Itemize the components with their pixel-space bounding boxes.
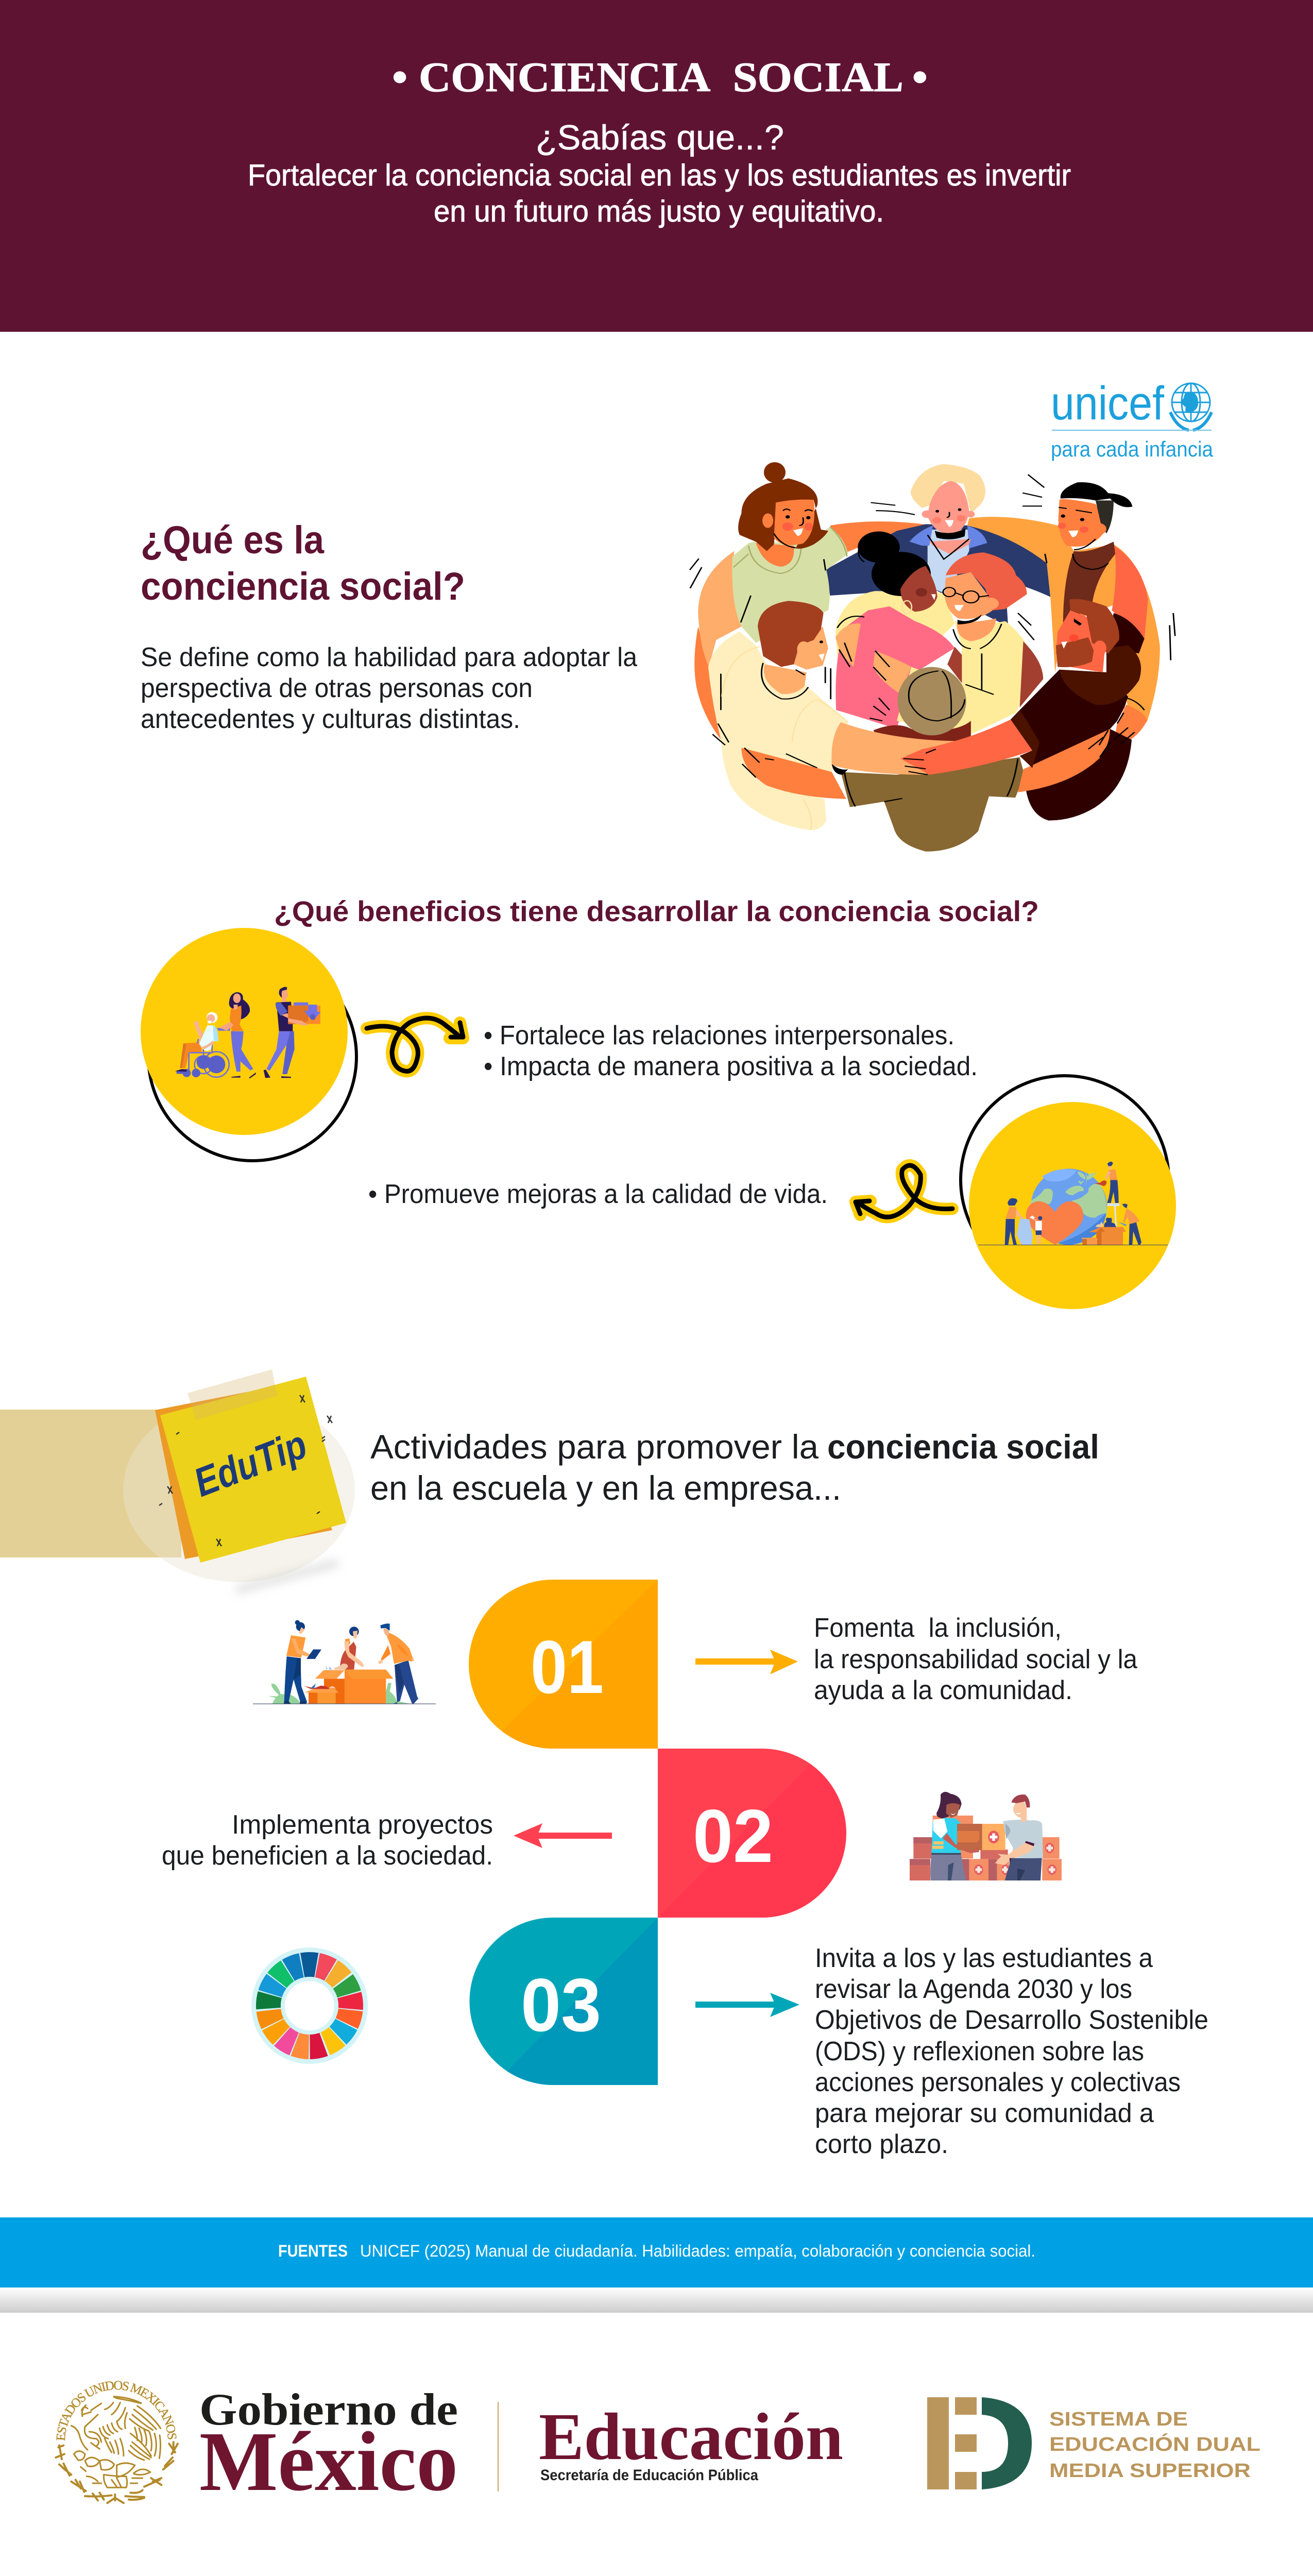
panel: step 01 [253, 1580, 1137, 1749]
definition text: antecedentes y culturas distintas. [141, 704, 520, 734]
step text: para mejorar su comunidad a [815, 2098, 1154, 2128]
step text: que beneficien a la sociedad. [162, 1841, 493, 1871]
benefit text: • Fortalece las relaciones interpersonales. [484, 1021, 954, 1050]
arrow: squiggle right [367, 1018, 463, 1071]
illustration: helping people [175, 987, 321, 1078]
edutip label: EduTip [188, 1421, 313, 1505]
logo: sistema de educacion dual: SISTEMA DE [1049, 2409, 1188, 2430]
arrow [514, 1823, 612, 1848]
intro text [248, 159, 1071, 228]
illustration: people hugging in a circle [690, 462, 1175, 852]
panel: step 02: 02 [693, 1794, 773, 1878]
panel: step 03: 03 [521, 1963, 601, 2047]
benefit text [484, 1021, 978, 1081]
panel: header [0, 0, 1313, 332]
logo: educacion: Educación [539, 2400, 843, 2474]
panel: benefit one [141, 928, 978, 1161]
sources text: FUENTES [278, 2242, 348, 2260]
arrow: squiggle left [856, 1165, 952, 1217]
panel: benefit two [368, 1076, 1176, 1309]
unicef logo: para cada infancia [1051, 437, 1214, 461]
definition text [141, 642, 637, 734]
icon: sdg wheel [251, 1947, 368, 2064]
heading: benefits: ¿Qué beneficios tiene desarrollar la conciencia social? [274, 895, 1039, 927]
intro text: en un futuro más justo y equitativo. [434, 195, 884, 228]
definition text: perspectiva de otras personas con [141, 673, 533, 703]
step text: Invita a los y las estudiantes a [815, 1943, 1153, 1973]
heading: conciencia social? [141, 565, 465, 608]
illustration: earth and heart [978, 1162, 1168, 1245]
panel: edutip note [0, 1369, 355, 1589]
step text: (ODS) y reflexionen sobre las [815, 2037, 1144, 2066]
benefit text: • Promueve mejoras a la calidad de vida. [368, 1179, 828, 1209]
panel: que es la conciencia social [141, 518, 637, 734]
arrow [695, 1993, 799, 2017]
step text: corto plazo. [815, 2129, 948, 2159]
step text: Fomenta la inclusión, [814, 1613, 1062, 1643]
icon: mexican coat of arms: ESTADOS UNIDOS MEXICANOS [56, 2381, 176, 2441]
definition text: Se define como la habilidad para adoptar la [141, 642, 637, 672]
subtitle: ¿Sabías que...? [536, 118, 784, 157]
step text [162, 1810, 493, 1871]
illustration: donation box [253, 1620, 436, 1704]
step text: Implementa proyectos [232, 1810, 493, 1840]
step text: acciones personales y colectivas [815, 2067, 1181, 2097]
step text: revisar la Agenda 2030 y los [815, 1974, 1132, 2004]
heading [141, 518, 465, 608]
arrow [695, 1650, 798, 1674]
logo: gobierno de mexico: Gobierno de [199, 2385, 458, 2435]
illustration: volunteers with boxes [910, 1792, 1062, 1880]
icon: mexican coat of arms [55, 2381, 179, 2504]
heading: activities [370, 1428, 1099, 1507]
logo: sistema de educacion dual: EDUCACIÓN DUAL [1049, 2433, 1260, 2455]
unicef logo [1051, 377, 1214, 461]
logo: educacion: Secretaría de Educación Pública [540, 2467, 758, 2484]
benefit text: • Impacta de manera positiva a la sociedad. [484, 1052, 978, 1081]
intro text: Fortalecer la conciencia social en las y los estudiantes es invertir [248, 159, 1071, 192]
panel: step 01: 01 [531, 1625, 604, 1709]
step text [815, 1943, 1208, 2159]
step text [814, 1613, 1137, 1705]
step text: la responsabilidad social y la [814, 1645, 1137, 1674]
logo: gobierno de mexico: México [199, 2414, 458, 2509]
unicef logo: unicef [1051, 377, 1164, 430]
panel: sources [0, 2217, 1313, 2313]
logo: sistema de educacion dual [927, 2397, 1260, 2489]
step text: Objetivos de Desarrollo Sostenible [815, 2005, 1208, 2035]
step text: ayuda a la comunidad. [814, 1675, 1072, 1705]
heading: activities: Actividades para promover la [370, 1428, 819, 1466]
panel: step 03 [251, 1918, 1208, 2159]
panel: step 02 [162, 1749, 1062, 1918]
heading: activities: en la escuela y en la empresa... [370, 1469, 841, 1507]
heading: activities: conciencia social [827, 1428, 1099, 1466]
title: • CONCIENCIA SOCIAL • [392, 54, 928, 100]
sources text: UNICEF (2025) Manual de ciudadanía. Habilidades: empatía, colaboración y conciencia social. [360, 2242, 1035, 2260]
heading: ¿Qué es la [141, 518, 325, 562]
logo: sistema de educacion dual: MEDIA SUPERIOR [1049, 2460, 1251, 2482]
